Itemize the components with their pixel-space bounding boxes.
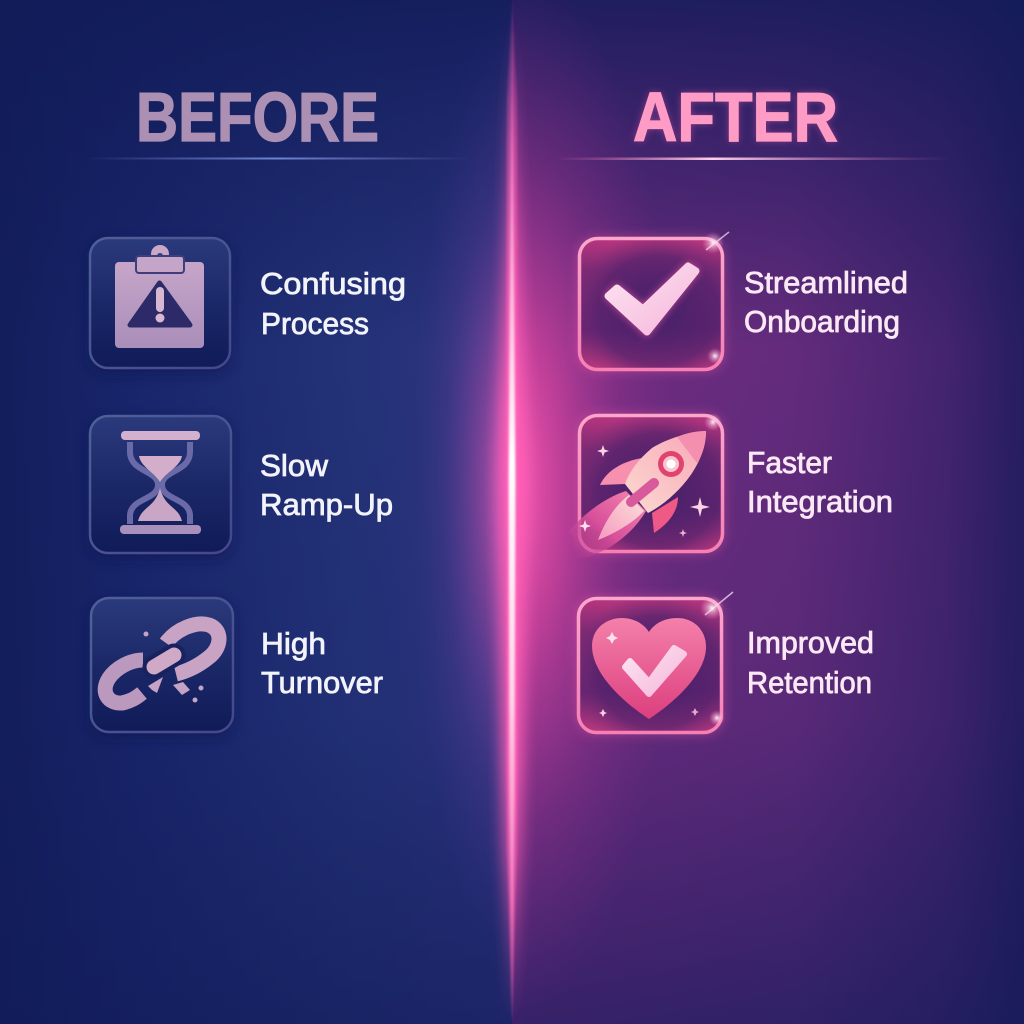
label: faster integration: Integration — [747, 484, 893, 519]
label: improved retention: Retention — [747, 665, 872, 700]
item: faster integration — [568, 413, 893, 558]
heading: before: BEFORE — [136, 78, 379, 156]
panel: before — [85, 78, 470, 738]
label: faster integration: Faster — [747, 445, 832, 480]
label: confusing process: Confusing — [260, 266, 406, 301]
label: slow ramp-up: Ramp-Up — [260, 487, 393, 522]
icon: clipboard with warning — [89, 238, 231, 374]
label: improved retention: Improved — [747, 625, 874, 660]
label: confusing process: Process — [261, 306, 369, 341]
label: streamlined onboarding: Onboarding — [744, 304, 900, 339]
item: high turnover — [90, 598, 383, 738]
item: improved retention — [577, 592, 874, 734]
icon: broken chain — [90, 598, 234, 738]
glowing center divider — [498, 0, 528, 1024]
icon: check mark card — [578, 232, 729, 371]
heading: after: AFTER — [633, 78, 838, 156]
icon: heart with check — [577, 592, 733, 734]
label: slow ramp-up: Slow — [260, 448, 329, 483]
item: confusing process — [89, 238, 406, 374]
item: slow ramp-up — [89, 416, 393, 559]
icon: hourglass — [89, 416, 232, 559]
icon: rocket — [568, 413, 724, 558]
label: high turnover: Turnover — [261, 665, 383, 700]
item: streamlined onboarding — [578, 232, 908, 371]
label: high turnover: High — [261, 626, 326, 661]
label: streamlined onboarding: Streamlined — [744, 265, 908, 300]
panel: after — [555, 78, 950, 734]
heading rule: before — [85, 158, 470, 160]
heading rule: after — [555, 158, 950, 160]
heading: after: AFTER — [633, 78, 838, 156]
